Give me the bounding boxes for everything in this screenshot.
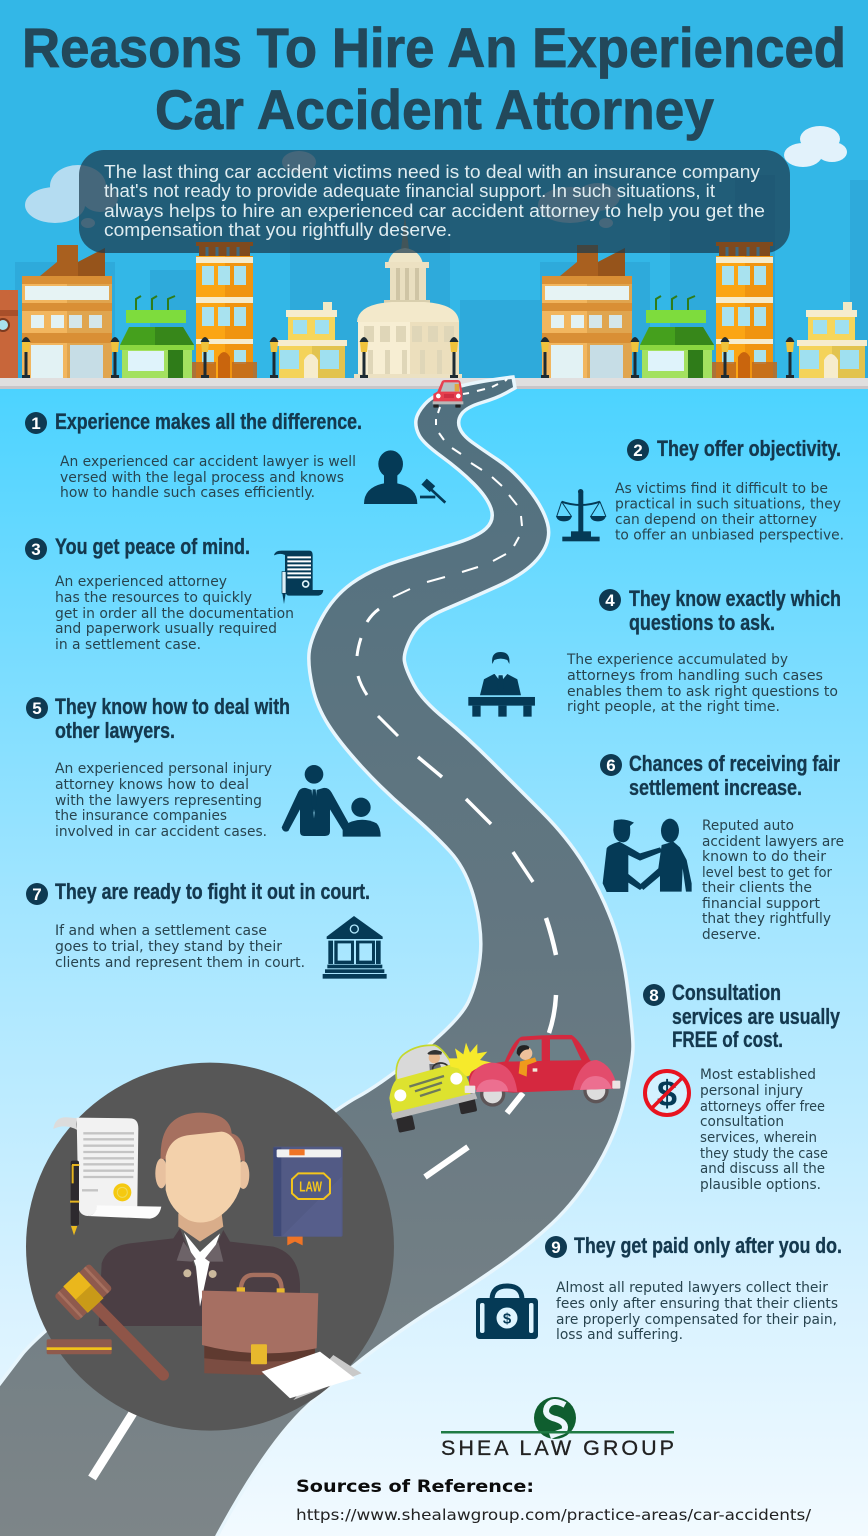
illustration: lawyer circle — [26, 1063, 394, 1431]
icon: handshake — [603, 819, 692, 892]
reason 6: deserve. — [702, 927, 761, 943]
title: Car Accident Attorney — [155, 78, 714, 141]
impact burst — [448, 1043, 492, 1077]
logo: Shea Law Group: SHEA LAW GROUP — [441, 1436, 674, 1460]
reason 8: plausible options. — [700, 1177, 821, 1193]
capitol building — [354, 215, 462, 378]
reason 9: loss and suffering. — [556, 1327, 683, 1343]
reason 8: services, wherein — [700, 1130, 817, 1146]
reason 1: An experienced car accident lawyer is well — [60, 454, 356, 470]
icon: red car on road — [433, 380, 463, 408]
clouds: top right — [784, 126, 847, 167]
reason 4: 4 — [605, 591, 615, 610]
reason 6: financial support — [702, 896, 821, 912]
yellow car — [389, 1045, 477, 1133]
reason 6: accident lawyers are — [702, 834, 844, 850]
reason 8: consultation — [700, 1114, 784, 1130]
reason 5: other lawyers. — [55, 718, 175, 743]
reason 3: get in order all the documentation — [55, 606, 294, 622]
intro panel: compensation that you rightfully deserve. — [104, 219, 452, 240]
reason 3: 3 — [31, 540, 41, 559]
intro panel: that's not ready to provide adequate financial support. In such situations, it — [104, 180, 715, 201]
sources of reference: Sources of Reference: — [296, 1477, 534, 1497]
reason 8: Consultation — [672, 980, 781, 1005]
icon: lawyer with client — [282, 765, 381, 837]
street lamps — [22, 337, 794, 378]
reason 5 — [26, 694, 290, 840]
reason 3: in a settlement case. — [55, 637, 201, 653]
reason 6 — [600, 751, 844, 943]
reason 8: personal injury — [700, 1083, 803, 1099]
sources of reference: https://www.shealawgroup.com/practice-areas/car-accidents/ — [296, 1506, 812, 1524]
skyline silhouettes — [15, 170, 868, 378]
clouds — [25, 151, 620, 228]
reason 7: clients and represent them in court. — [55, 955, 305, 971]
street buildings right — [542, 245, 867, 378]
reason 1: 1 — [31, 414, 41, 433]
reason 5: They know how to deal with — [55, 694, 290, 719]
reason 4: The experience accumulated by — [566, 652, 788, 668]
reason 9 — [545, 1233, 842, 1343]
icon: courthouse — [323, 916, 387, 979]
reason 1: Experience makes all the difference. — [55, 409, 362, 434]
reason 6: Reputed auto — [702, 818, 794, 834]
reason 2: 2 — [633, 441, 643, 460]
reason 2: practical in such situations, they — [615, 496, 841, 512]
reason 7: 7 — [32, 885, 42, 904]
reason 2: can depend on their attorney — [615, 512, 817, 528]
reason 8: and discuss all the — [700, 1161, 825, 1177]
reason 9: 9 — [551, 1238, 561, 1257]
loose papers — [262, 1352, 362, 1400]
reason 4: questions to ask. — [629, 610, 775, 635]
tower crowns — [196, 242, 773, 256]
certificate scroll and pen — [53, 1117, 161, 1235]
reason 4: attorneys from handling such cases — [567, 668, 823, 684]
illustration: crashed cars — [389, 1035, 620, 1133]
red car — [465, 1035, 620, 1107]
reason 4: enables them to ask right questions to — [567, 684, 838, 700]
reason 1: how to handle such cases efficiently. — [60, 485, 315, 501]
icon: lawyer with gavel — [364, 450, 445, 504]
sources of reference — [296, 1477, 812, 1524]
briefcase — [202, 1275, 318, 1375]
reason 3 — [25, 534, 294, 653]
icon: money bag briefcase — [476, 1286, 538, 1339]
reason 5: attorney knows how to deal — [55, 777, 249, 793]
reason 2: to offer an unbiased perspective. — [615, 528, 844, 544]
reason 2: As victims find it difficult to be — [615, 481, 828, 497]
law book: LAW — [299, 1179, 323, 1196]
intro panel — [79, 150, 790, 253]
reason 5: An experienced personal injury — [55, 761, 272, 777]
reason 6: their clients the — [702, 880, 812, 896]
reason 8: 8 — [649, 986, 659, 1005]
reason 3: and paperwork usually required — [55, 621, 277, 637]
reason 8: attorneys offer free — [700, 1099, 825, 1115]
reason 3: An experienced attorney — [55, 574, 227, 590]
reason 5: involved in car accident cases. — [55, 824, 267, 840]
reason 6: level best to get for — [702, 865, 832, 881]
logo: Shea Law Group — [441, 1397, 674, 1460]
reason 5: with the lawyers representing — [55, 793, 262, 809]
reason 1: versed with the legal process and knows — [60, 470, 344, 486]
street buildings left — [0, 245, 347, 378]
icon: attorney at desk — [468, 652, 535, 717]
intro panel: The last thing car accident victims need is to deal with an insurance company — [104, 161, 761, 182]
reason 7: They are ready to fight it out in court. — [55, 879, 370, 904]
title — [22, 16, 846, 141]
reason 8: FREE of cost. — [672, 1027, 783, 1052]
reason 4: right people, at the right time. — [567, 699, 780, 715]
lawyer figure — [99, 1113, 300, 1326]
reason 7: goes to trial, they stand by their — [55, 939, 282, 955]
reason 6: settlement increase. — [629, 775, 802, 800]
reason 6: that they rightfully — [702, 911, 831, 927]
page background — [0, 388, 868, 1536]
reason 5: the insurance companies — [55, 808, 227, 824]
reason 8: Most established — [700, 1067, 816, 1083]
reason 2 — [615, 436, 844, 544]
reason 3: has the resources to quickly — [55, 590, 252, 606]
icon: money bag briefcase: $ — [503, 1310, 512, 1328]
reason 8 — [643, 980, 841, 1193]
gavel — [47, 1263, 163, 1375]
icon: scales of justice — [556, 489, 606, 541]
reason 7: If and when a settlement case — [55, 923, 267, 939]
reason 9: fees only after ensuring that their clients — [556, 1296, 838, 1312]
reason 1 — [25, 409, 362, 501]
sky — [0, 0, 868, 380]
winding road — [0, 377, 633, 1536]
reason 3: You get peace of mind. — [55, 534, 250, 559]
reason 7 — [26, 879, 370, 971]
reason 9: Almost all reputed lawyers collect their — [556, 1280, 828, 1296]
reason 6: known to do their — [702, 849, 826, 865]
reason 4 — [566, 586, 841, 715]
law book — [273, 1147, 343, 1245]
icon: no dollar sign: $ — [657, 1073, 677, 1114]
icon: legal scroll — [274, 551, 323, 604]
reason 6: 6 — [606, 756, 616, 775]
icon: no dollar sign — [645, 1071, 689, 1115]
sidewalk — [0, 378, 868, 389]
reason 8: they study the case — [700, 1146, 828, 1162]
reason 5: 5 — [32, 699, 42, 718]
intro panel: always helps to hire an experienced car accident attorney to help you get the — [104, 200, 765, 221]
reason 9: are properly compensated for their pain, — [556, 1312, 837, 1328]
